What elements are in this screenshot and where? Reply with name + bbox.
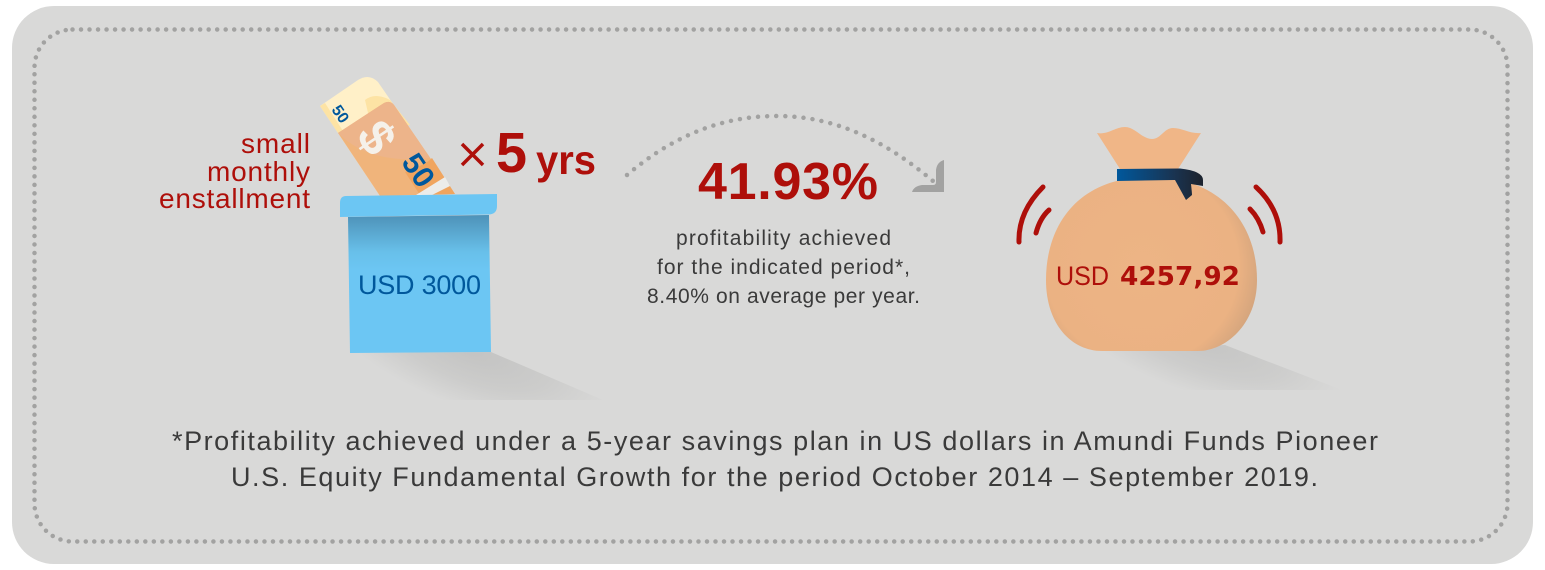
- profitability description: profitability achieved: [676, 227, 891, 250]
- shadow: box: [350, 352, 603, 400]
- arrow: dotted arc: [627, 116, 944, 192]
- small 50: 50: [328, 102, 352, 127]
- label: small monthly enstallment: monthly: [207, 156, 310, 187]
- $ symbol: $: [346, 110, 408, 165]
- label: small monthly enstallment: enstallment: [159, 183, 310, 214]
- multiplier: x 5 yrs: [462, 121, 596, 185]
- icon: money bag: 4257,92: [1120, 262, 1240, 292]
- footnote: [172, 426, 1378, 492]
- profitability percentage: 41.93%: [698, 153, 878, 211]
- box amount: USD 3000: [358, 270, 481, 300]
- icon: banknote: [320, 77, 455, 196]
- multiplier: x 5 yrs: 5: [496, 121, 527, 185]
- profitability description: for the indicated period*,: [657, 256, 910, 279]
- arrow head: [912, 160, 944, 192]
- icon: vibration marks: [1019, 187, 1280, 242]
- label: small monthly enstallment: [159, 128, 310, 214]
- bag amount: USD: [1056, 261, 1109, 291]
- icon: box: [340, 194, 497, 353]
- large 50: 50: [395, 148, 441, 194]
- footnote: *Profitability achieved under a 5-year savings plan in US dollars in Amundi Funds Pioneer: [172, 426, 1378, 456]
- profitability description: 8.40% on average per year.: [647, 285, 920, 308]
- multiplier: x 5 yrs: yrs: [536, 137, 596, 183]
- icon: money bag: [1046, 127, 1257, 351]
- footnote: U.S. Equity Fundamental Growth for the period October 2014 – September 2019.: [231, 462, 1318, 492]
- shadow: bag: [1092, 345, 1342, 390]
- label: small monthly enstallment: small: [241, 128, 310, 159]
- profitability description: [647, 227, 920, 308]
- bag tie: [1117, 168, 1203, 200]
